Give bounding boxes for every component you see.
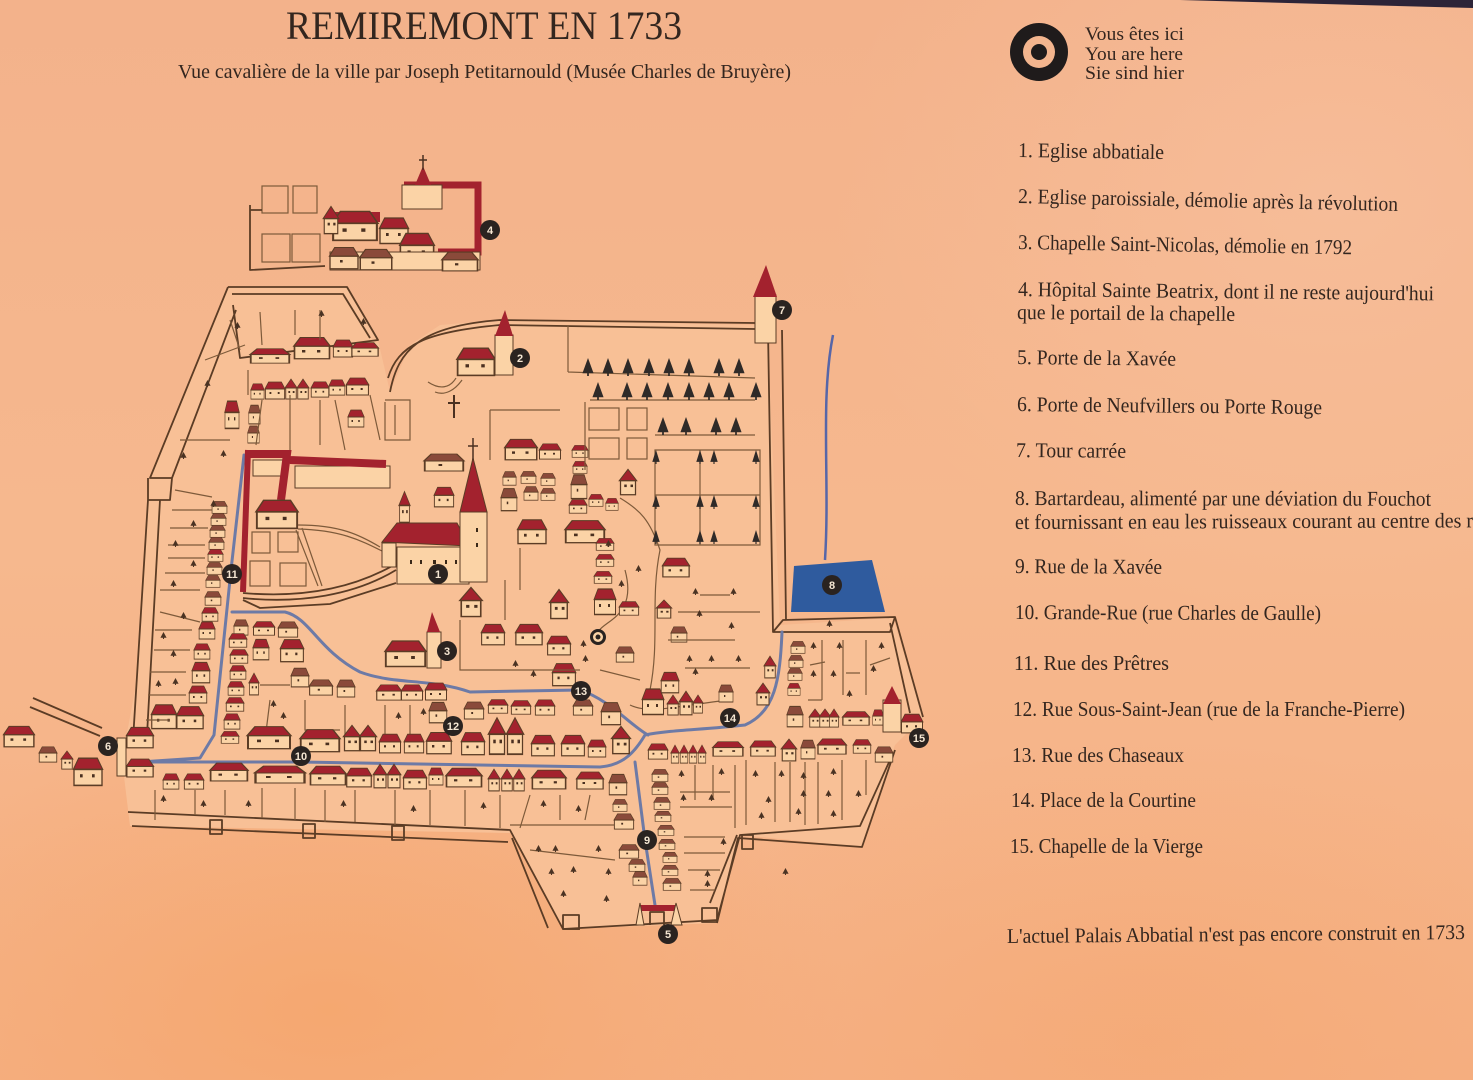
you are here map marker — [590, 629, 606, 645]
north-east quarter houses — [787, 640, 923, 733]
numbered key: 15. Chapelle de la Vierge — [1010, 834, 1203, 858]
upper-left houses — [205, 310, 560, 460]
map of the town — [3, 155, 929, 944]
marker 11 — [222, 564, 242, 584]
marker 13 — [571, 681, 591, 701]
numbered key: 14. Place de la Courtine — [1011, 788, 1196, 812]
marker 8 — [822, 575, 842, 595]
chapel 3 — [385, 612, 441, 668]
hospital enclosure — [250, 155, 480, 271]
numbered key: 8. Bartardeau, alimenté par une déviation du Fouchot — [1015, 486, 1431, 511]
tower 7 — [753, 265, 777, 343]
marker 2 — [510, 348, 530, 368]
numbered key: 5. Porte de la Xavée — [1017, 345, 1176, 371]
marker 7 — [772, 300, 792, 320]
houses south of the abbey — [221, 620, 447, 743]
legend text: you are here: Sie sind hier — [1085, 63, 1185, 84]
orchard and fields — [568, 325, 762, 545]
pond: bartardeau — [791, 560, 885, 612]
marker 1: 1 — [435, 569, 441, 581]
marker 6: 6 — [105, 741, 111, 753]
gate: porte de Neufvillers, outer houses — [3, 698, 103, 785]
gate: porte de la Xavée — [636, 903, 682, 925]
marker 5: 5 — [665, 929, 671, 941]
legend icon: you are here — [1010, 23, 1068, 81]
numbered key: 13. Rue des Chaseaux — [1012, 743, 1184, 767]
abbey complex — [243, 438, 487, 608]
rivers and streets — [140, 335, 833, 905]
title: REMIREMONT EN 1733 — [286, 3, 682, 48]
numbered key: 10. Grande-Rue (rue Charles de Gaulle) — [1015, 600, 1321, 625]
legend text: you are here: You are here — [1085, 44, 1183, 65]
left column houses — [146, 440, 230, 729]
marker 4 — [480, 220, 500, 240]
marker 11: 11 — [226, 569, 238, 581]
marker 10 — [291, 746, 311, 766]
legend text: you are here — [1085, 24, 1185, 84]
numbered key: 3. Chapelle Saint-Nicolas, démolie en 1792 — [1018, 230, 1352, 259]
top edge shadow — [1180, 0, 1473, 8]
marker 12: 12 — [447, 721, 459, 733]
numbered key: 12. Rue Sous-Saint-Jean (rue de la Franche-Pierre) — [1013, 697, 1405, 721]
row north of main street — [117, 700, 631, 777]
marker 13: 13 — [575, 686, 587, 698]
numbered key — [1010, 138, 1473, 858]
legend text: you are here: Vous êtes ici — [1085, 24, 1184, 45]
numbered key: 9. Rue de la Xavée — [1015, 554, 1162, 579]
marker 4: 4 — [487, 225, 494, 237]
marker 3: 3 — [444, 646, 450, 658]
marker 2: 2 — [517, 353, 523, 365]
garden trees — [155, 310, 885, 902]
marker 9: 9 — [644, 835, 650, 847]
marker 10: 10 — [295, 751, 307, 763]
numbered key: 11. Rue des Prêtres — [1014, 651, 1169, 675]
row south of main street — [155, 763, 627, 860]
marker 3 — [437, 641, 457, 661]
numbered key: 7. Tour carrée — [1016, 438, 1126, 463]
south-east row and gate street — [613, 739, 893, 890]
numbered key: que le portail de la chapelle — [1017, 300, 1235, 326]
church 2 — [428, 310, 513, 418]
numbered key: 6. Porte de Neufvillers ou Porte Rouge — [1017, 392, 1322, 419]
marker 12 — [443, 716, 463, 736]
marker 6 — [98, 736, 118, 756]
subtitle: Vue cavalière de la ville par Joseph Petitarnould (Musée Charles de Bruyère) — [178, 61, 791, 83]
marker 14: 14 — [724, 713, 737, 725]
central quarter houses — [460, 439, 776, 715]
marker 1 — [428, 564, 448, 584]
numbered key: 4. Hôpital Sainte Beatrix, dont il ne reste aujourd'hui — [1018, 277, 1434, 305]
marker 15: 15 — [913, 733, 925, 745]
marker 8: 8 — [829, 580, 835, 592]
marker 15 — [909, 728, 929, 748]
marker 5 — [658, 924, 678, 944]
numbered key: 2. Eglise paroissiale, démolie après la révolution — [1018, 184, 1399, 216]
marker 14 — [720, 708, 740, 728]
marker 7: 7 — [779, 305, 785, 317]
numbered key: 1. Eglise abbatiale — [1018, 138, 1164, 164]
town walls — [122, 287, 923, 929]
marker 9 — [637, 830, 657, 850]
